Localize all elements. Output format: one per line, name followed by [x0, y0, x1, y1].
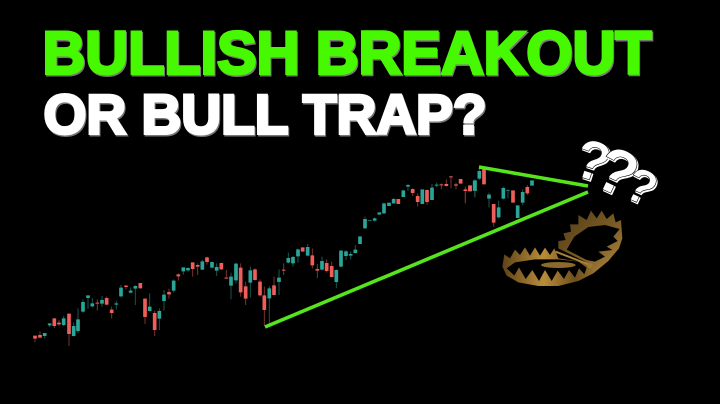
question mark 1: ?	[567, 125, 619, 196]
hinge	[587, 263, 593, 268]
question mark 3: ?	[616, 157, 665, 217]
trap lower jaw	[502, 247, 593, 286]
headline: bullish breakout: BULLISH BREAKOUT	[42, 20, 652, 86]
lower jaw opening	[507, 259, 587, 281]
trigger arm	[556, 252, 588, 264]
title	[42, 20, 652, 147]
trend line: upper resistance	[479, 167, 588, 186]
question mark 2: ?	[584, 131, 650, 213]
upper jaw opening	[567, 225, 620, 262]
candlestick chart	[35, 167, 532, 346]
trigger plate	[541, 262, 576, 268]
headline: or bull trap: OR BULL TRAP?	[44, 82, 486, 146]
headline: bullish breakout: BULLISH BREAKOUT	[44, 21, 652, 88]
headline: or bull trap: OR BULL TRAP?	[44, 84, 488, 147]
trap upper jaw	[558, 211, 622, 273]
question mark 3: ?	[617, 159, 666, 219]
icon: question marks	[567, 125, 667, 219]
icon: bear trap	[502, 211, 622, 286]
trend line: rising support	[265, 192, 588, 327]
question mark 1: ?	[568, 127, 620, 197]
question mark 2: ?	[585, 132, 651, 214]
